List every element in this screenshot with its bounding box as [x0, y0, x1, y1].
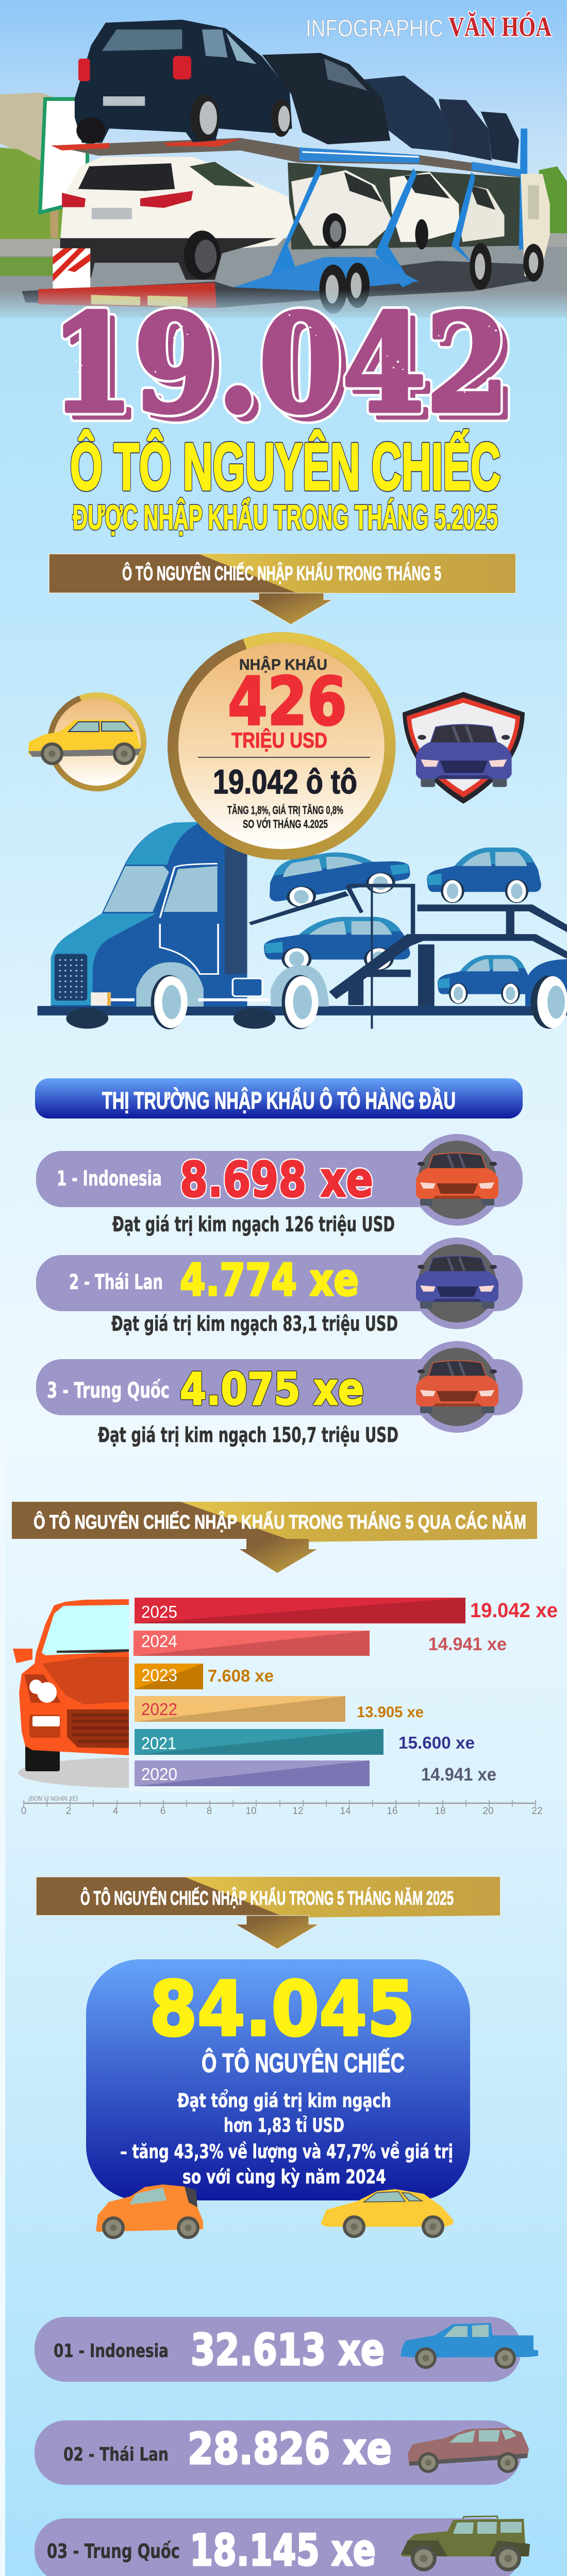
bar 2023: 2023: [141, 1666, 177, 1685]
market row: China: [36, 1341, 523, 1433]
note: China value: Đạt giá trị kim ngạch 150,7 triệu USD: [98, 1423, 398, 1447]
value: 32.613 xe: [191, 2325, 385, 2375]
five month row: Thailand: [35, 2420, 529, 2485]
country label: 1 - Indonesia: [57, 1167, 162, 1191]
value: 84.045: 84.045: [149, 1965, 415, 2053]
photo fade into background: [0, 290, 567, 324]
headline number 19.042: 19.042: [51, 285, 509, 443]
bar 2025: [135, 1598, 558, 1623]
icon: blue car: [416, 1256, 498, 1309]
section banner: 5 tháng năm 2025: [36, 1877, 500, 1949]
market row: Indonesia: [36, 1134, 523, 1226]
five month row: China: [35, 2516, 530, 2576]
icon: yellow beetle car: [321, 2189, 453, 2238]
bar 2025: 2025: [141, 1602, 177, 1621]
note line 1: TĂNG 1,8%, GIÁ TRỊ TĂNG 0,8%: [227, 804, 343, 817]
five month row: Indonesia: [35, 2317, 538, 2382]
value: 4.075 xe: [180, 1364, 364, 1415]
logo: Infographic Văn Hóa: INFOGRAPHIC: [306, 14, 443, 42]
axis: 6: [160, 1806, 165, 1817]
chart: yearly imports in May: [21, 1598, 558, 1817]
country label: 03 - Trung Quốc: [47, 2540, 180, 2563]
axis: 2: [66, 1806, 71, 1817]
text line 1: Đạt tổng giá trị kim ngạch: [177, 2090, 391, 2112]
icon: blue car on shield: [403, 692, 525, 804]
bar 2022: [135, 1696, 424, 1722]
text line 3: – tăng 43,3% về lượng và 47,7% về giá trị: [120, 2141, 453, 2163]
bar 2024: [134, 1631, 507, 1656]
text line 4: so với cùng kỳ năm 2024: [182, 2166, 386, 2188]
divider: [198, 757, 370, 758]
bar 2021: 15.600 xe: [398, 1733, 475, 1752]
bar 2022: 2022: [141, 1700, 177, 1719]
bar 2023: [135, 1664, 274, 1689]
bar 2024: 2024: [141, 1632, 177, 1651]
bar 2025: 19.042 xe: [470, 1599, 558, 1622]
axis: 8: [207, 1806, 212, 1817]
value: 8.698 xe: [180, 1152, 373, 1208]
market row: Thailand: [36, 1238, 523, 1329]
photo: car carrier truck with dark and white cars: [0, 0, 567, 317]
axis: [21, 1794, 543, 1817]
value: 426: 426: [228, 664, 347, 740]
value: 4.075 xe: [180, 1364, 364, 1415]
bar 2021: 2021: [141, 1734, 176, 1753]
icon: blue pickup: [401, 2323, 538, 2369]
text line 2: hơn 1,83 tỉ USD: [224, 2114, 344, 2137]
icon: orange car: [416, 1153, 498, 1206]
note: Thailand value: Đạt giá trị kim ngạch 83,1 triệu USD: [111, 1312, 398, 1336]
panel: five month total: [86, 1959, 470, 2200]
note: Indonesia value: Đạt giá trị kim ngạch 126 triệu USD: [112, 1213, 395, 1236]
axis: 10: [245, 1806, 257, 1817]
headline number 19.042: 19.042: [58, 292, 516, 449]
axis: 0: [21, 1806, 26, 1817]
icon: yellow car in circle: [28, 692, 146, 791]
section banner: tháng 5 qua các năm: [12, 1502, 537, 1573]
icon: orange small car: [96, 2184, 203, 2239]
note line 2: SO VỚI THÁNG 4.2025: [243, 818, 328, 831]
value: 28.826 xe: [188, 2424, 392, 2474]
unit: triệu USD: TRIỆU USD: [231, 727, 327, 752]
header: top import markets: [35, 1078, 523, 1118]
bar 2020: 2020: [141, 1765, 177, 1784]
headline number 19.042: 19.042: [58, 292, 516, 449]
bar 2020: [135, 1760, 496, 1786]
label: ô tô nguyên chiếc: Ô TÔ NGUYÊN CHIẾC: [202, 2048, 405, 2078]
value: 19.042 ô tô: 19.042 ô tô: [213, 762, 357, 801]
illustration: blue car transporter truck: [38, 822, 567, 1029]
axis: 16: [387, 1806, 398, 1817]
country label: 01 - Indonesia: [54, 2341, 169, 2362]
icon: brown SUV: [408, 2428, 529, 2473]
value: 4.774 xe: [180, 1255, 359, 1306]
bar 2023: 7.608 xe: [208, 1666, 274, 1685]
icon: green jeep: [401, 2516, 530, 2571]
bar 2021: [135, 1729, 475, 1755]
axis: 12: [292, 1806, 304, 1817]
circle: 426 million USD import value: [168, 632, 395, 860]
icon: orange car front half: [13, 1599, 240, 1793]
axis: 4: [113, 1806, 119, 1817]
axis: 18: [435, 1806, 446, 1817]
bar 2024: 14.941 xe: [428, 1634, 507, 1654]
axis: 20: [482, 1806, 494, 1817]
axis: 14: [340, 1806, 351, 1817]
axis: (ĐƠN VỊ NGHÌN XE): [28, 1794, 78, 1802]
left margin strip: [0, 1443, 5, 2576]
country label: 2 - Thái Lan: [69, 1270, 163, 1294]
bar 2020: 14.941 xe: [421, 1765, 496, 1785]
country label: 02 - Thái Lan: [63, 2444, 169, 2465]
value: 8.698 xe: [180, 1152, 373, 1208]
icon: red car: [416, 1361, 498, 1413]
axis: 22: [531, 1806, 543, 1817]
value: 18.145 xe: [190, 2525, 376, 2575]
section banner: tháng 5: [49, 554, 515, 624]
headline number 19.042: 19.042: [51, 285, 509, 443]
country label: 3 - Trung Quốc: [47, 1378, 170, 1403]
logo: Infographic Văn Hóa: [306, 11, 552, 42]
bar 2022: 13.905 xe: [357, 1704, 424, 1721]
label: nhập khẩu: NHẬP KHẨU: [239, 656, 327, 673]
